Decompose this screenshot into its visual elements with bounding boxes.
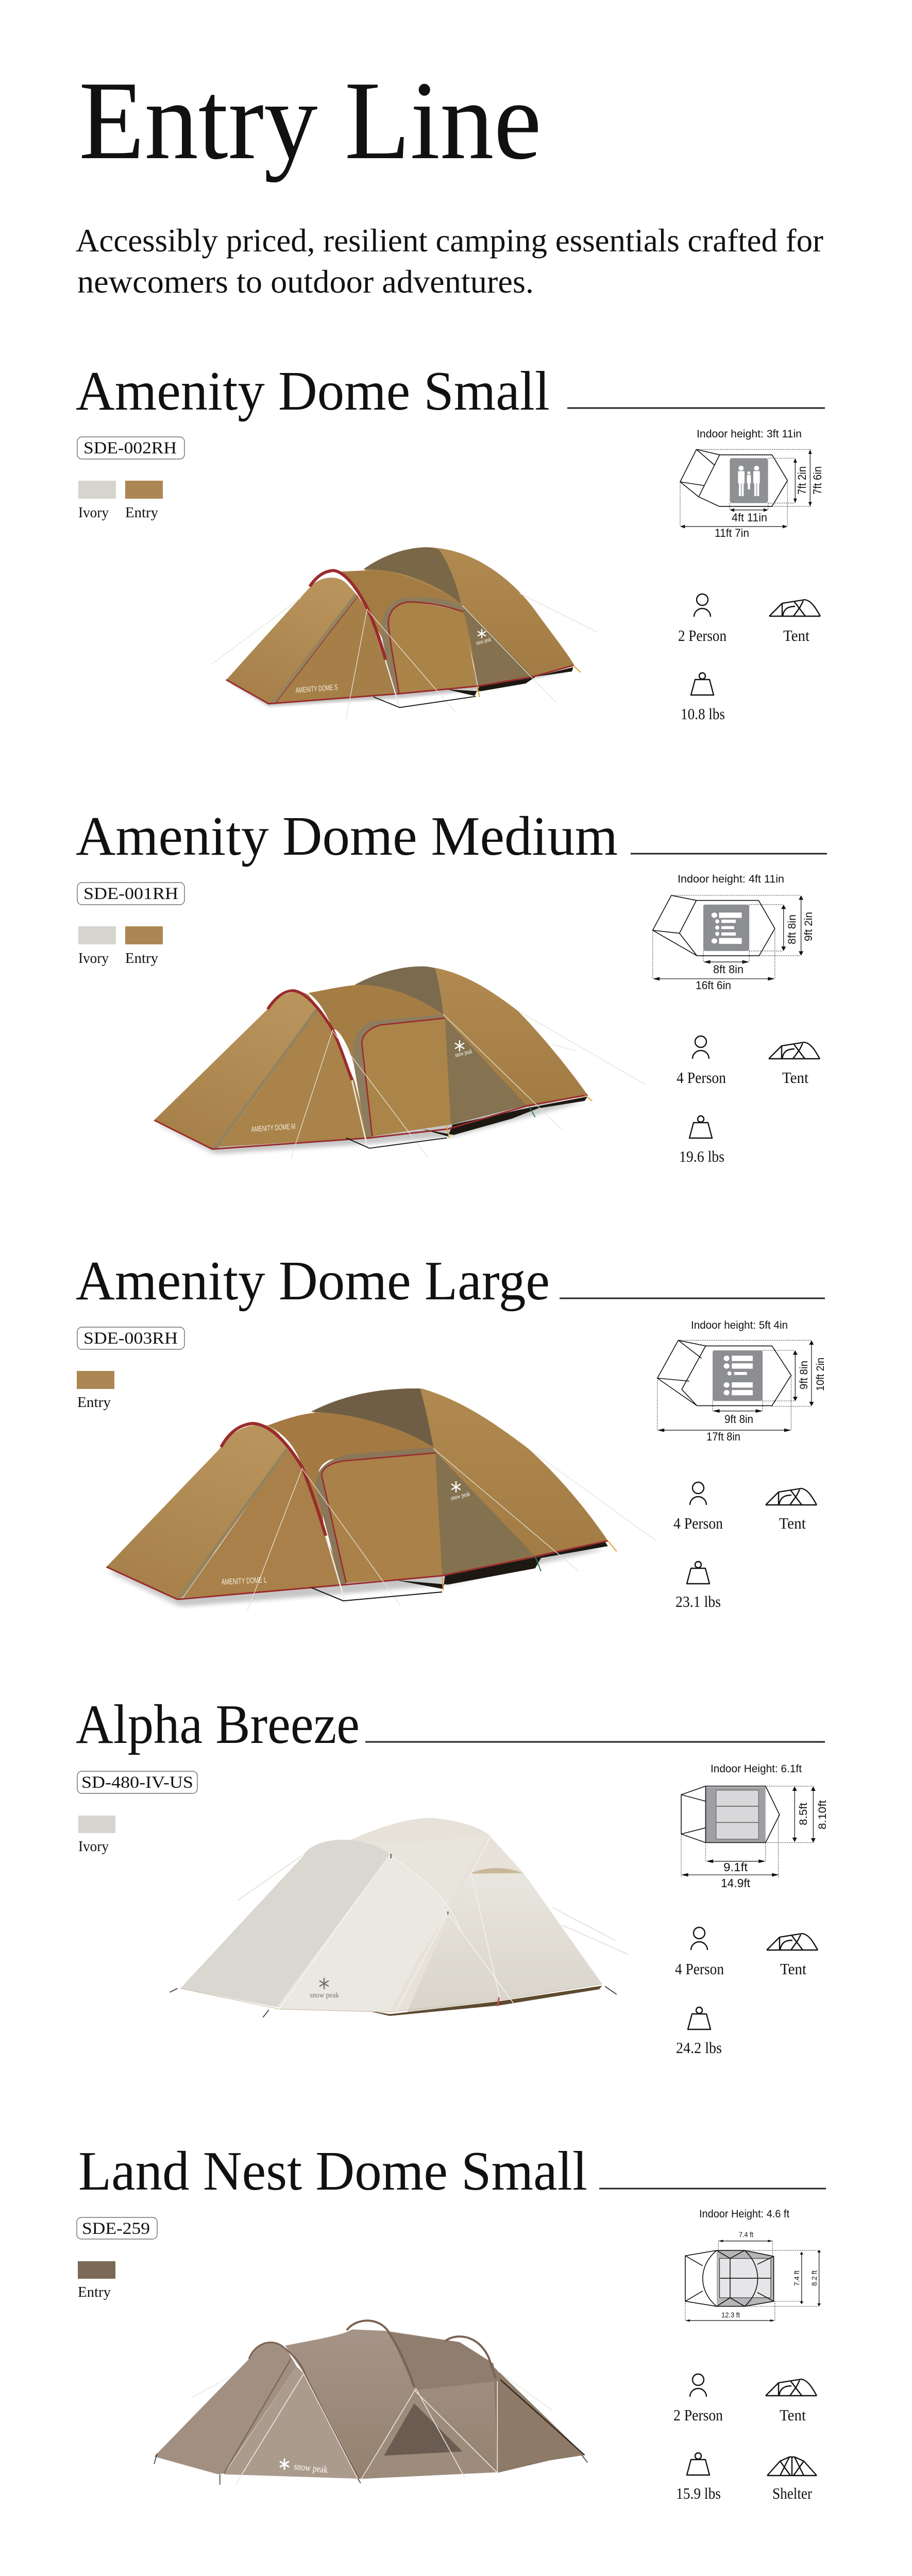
icon: weight: 10.8 lbs — [681, 705, 725, 723]
tent photo illustration — [211, 547, 597, 720]
model tag — [77, 1327, 184, 1349]
icon: type tent: Tent — [779, 1514, 806, 1532]
panel: Land Nest Dome Small — [77, 2141, 826, 2502]
icon: weight — [676, 2453, 721, 2502]
tent photo illustration: snow peak — [293, 2461, 329, 2476]
model tag: SDE-002RH — [83, 439, 177, 457]
floor plan diagram: 7.4 ft — [792, 2270, 801, 2286]
floor plan diagram: Indoor height: 5ft 4in — [691, 1319, 788, 1331]
panel: Amenity Dome Medium — [76, 806, 827, 1165]
floor plan diagram: 17ft 8in — [706, 1430, 740, 1443]
icon: weight: 19.6 lbs — [679, 1147, 724, 1165]
icon: type tent: Tent — [780, 2406, 806, 2424]
floor plan diagram — [657, 1319, 826, 1443]
floor plan diagram: 16ft 6in — [696, 979, 731, 992]
floor plan diagram — [680, 428, 824, 539]
intro text: newcomers to outdoor adventures. — [77, 263, 534, 300]
floor plan diagram: 12.3 ft — [721, 2311, 740, 2319]
floor plan diagram: Indoor Height: 4.6 ft — [699, 2208, 789, 2220]
floor plan diagram: 10ft 2in — [815, 1358, 826, 1391]
floor plan diagram: 7.4 ft — [739, 2230, 753, 2239]
floor plan diagram — [685, 2208, 821, 2321]
colour swatch — [78, 2261, 115, 2300]
icon: capacity: 4 Person — [675, 1960, 724, 1978]
icon: weight: 15.9 lbs — [676, 2484, 721, 2502]
tent photo illustration: AMENITY DOME S — [295, 683, 338, 695]
tent photo illustration — [154, 967, 646, 1159]
heading: Amenity Dome Medium — [76, 806, 618, 867]
model tag — [77, 437, 184, 459]
icon: type shelter: Shelter — [772, 2484, 813, 2502]
icon: type tent: Tent — [780, 1960, 806, 1978]
model tag: SDE-259 — [82, 2219, 150, 2238]
panel: Alpha Breeze — [76, 1694, 829, 2057]
floor plan diagram: 9ft 8in — [724, 1413, 753, 1426]
icon: weight — [681, 673, 725, 723]
floor plan diagram: 11ft 7in — [715, 527, 749, 539]
tent photo illustration — [154, 2320, 587, 2485]
model tag: SDE-001RH — [83, 885, 178, 903]
intro text: Accessibly priced, resilient camping essentials crafted for — [76, 222, 823, 259]
tent photo illustration: AMENITY DOME M — [251, 1122, 296, 1134]
heading: Amenity Dome Large — [76, 1250, 550, 1312]
heading: Amenity Dome Small — [76, 361, 550, 422]
floor plan diagram: 8.10ft — [817, 1800, 829, 1829]
floor plan diagram — [681, 1763, 829, 1890]
floor plan diagram: 8.5ft — [798, 1803, 809, 1825]
panel: Amenity Dome Large — [76, 1250, 826, 1611]
floor plan diagram: 14.9ft — [721, 1876, 751, 1890]
model tag: SDE-003RH — [83, 1329, 178, 1348]
colour swatch: Entry — [77, 1394, 111, 1411]
icon: capacity — [678, 594, 727, 645]
icon: weight: 23.1 lbs — [675, 1592, 721, 1611]
floor plan diagram: 7ft 2in — [796, 466, 808, 495]
tent photo illustration: snow peak — [454, 1047, 473, 1059]
floor plan diagram: 4ft 11in — [732, 511, 767, 524]
intro text — [76, 222, 823, 300]
colour swatches — [78, 481, 163, 521]
icon: capacity: 4 Person — [677, 1069, 726, 1087]
tent photo illustration: snow peak — [450, 1489, 471, 1502]
icon: weight: 24.2 lbs — [676, 2039, 722, 2057]
floor plan diagram: 9ft 8in — [798, 1361, 810, 1389]
icon: type tent: Tent — [782, 1069, 808, 1087]
model tag — [77, 883, 184, 905]
floor plan diagram: Indoor height: 4ft 11in — [678, 873, 784, 885]
icon: weight — [675, 1562, 721, 1611]
icon: capacity — [673, 1482, 723, 1532]
floor plan diagram: 9.1ft — [723, 1860, 748, 1874]
tent photo illustration: snow peak — [310, 1991, 339, 1999]
icon: capacity — [673, 2374, 723, 2424]
icon: type tent: Tent — [783, 626, 809, 645]
icon: capacity — [677, 1036, 726, 1087]
icon: weight — [676, 2007, 722, 2057]
floor plan diagram: 8ft 8in — [786, 914, 798, 944]
tent photo illustration: snow peak — [475, 635, 492, 647]
icon: type tent — [769, 1042, 820, 1087]
icon: type tent — [767, 1934, 818, 1978]
floor plan diagram: 8ft 8in — [713, 963, 744, 976]
heading: Land Nest Dome Small — [78, 2141, 587, 2202]
icon: capacity — [675, 1927, 724, 1978]
colour swatches — [78, 926, 163, 967]
icon: type tent — [766, 2379, 817, 2424]
floor plan diagram: 7ft 6in — [811, 466, 824, 495]
colour swatches: Entry — [125, 504, 158, 521]
floor plan diagram: Indoor Height: 6.1ft — [711, 1763, 802, 1775]
heading: Alpha Breeze — [76, 1694, 360, 1755]
floor plan diagram — [653, 873, 815, 992]
colour swatches: Ivory — [78, 504, 109, 521]
tent photo illustration — [170, 1818, 628, 2018]
panel: Amenity Dome Small — [76, 361, 825, 723]
tent photo illustration: AMENITY DOME L — [221, 1575, 267, 1587]
model tag — [77, 2217, 157, 2239]
icon: capacity: 4 Person — [673, 1514, 723, 1532]
tent photo illustration — [107, 1388, 656, 1611]
icon: capacity: 2 Person — [673, 2406, 723, 2424]
floor plan diagram: Indoor height: 3ft 11in — [697, 428, 802, 440]
page title: Entry Line — [79, 59, 542, 183]
colour swatch: Entry — [78, 2284, 111, 2300]
icon: type tent — [769, 600, 820, 645]
colour swatch — [78, 1816, 115, 1855]
colour swatch — [77, 1371, 114, 1411]
icon: weight — [679, 1116, 724, 1165]
icon: type tent — [766, 1488, 817, 1532]
floor plan diagram: 8.2 ft — [810, 2270, 818, 2286]
icon: type shelter — [767, 2457, 817, 2502]
colour swatch: Ivory — [78, 1838, 109, 1855]
colour swatches: Entry — [125, 950, 158, 967]
icon: capacity: 2 Person — [678, 626, 727, 645]
floor plan diagram: 9ft 2in — [803, 912, 815, 941]
model tag: SD-480-IV-US — [81, 1773, 193, 1792]
colour swatches: Ivory — [78, 950, 109, 967]
